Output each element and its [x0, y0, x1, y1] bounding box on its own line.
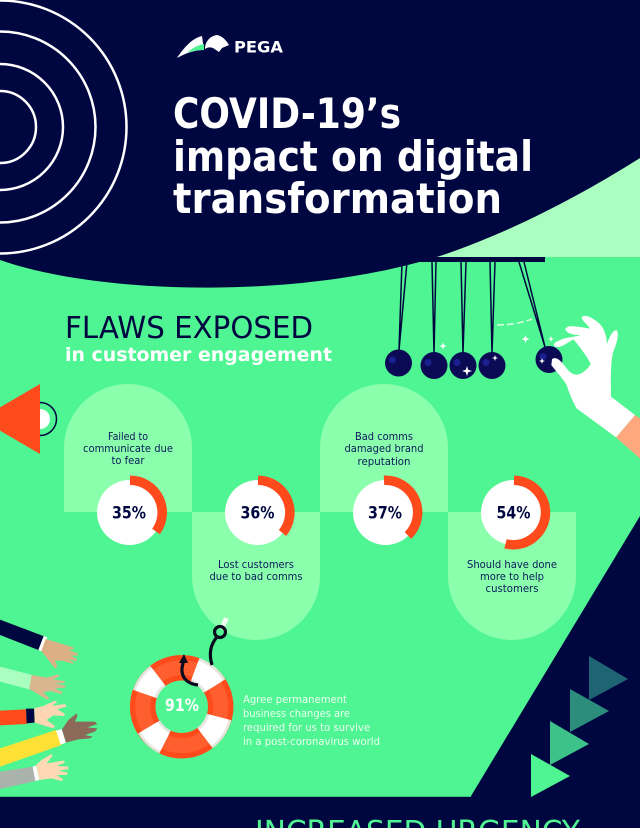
- icon: reaching hands: [0, 620, 97, 789]
- text: permanent change: [243, 693, 380, 748]
- heading: flaws exposed: FLAWS EXPOSED: [65, 311, 313, 346]
- stat: 36% lost customers: due to bad comms: [210, 570, 303, 583]
- logo: Pega: [177, 35, 284, 58]
- stat: 36% lost customers: 36%: [240, 504, 274, 524]
- ball highlights: [389, 353, 546, 366]
- stat: 35% failed to communicate: communicate due: [83, 442, 173, 455]
- stat: 37% damaged reputation: reputation: [358, 455, 411, 468]
- stat: 54% should have done more: more to help: [480, 570, 544, 583]
- cradle strings: [399, 262, 545, 353]
- icon: hand holding ball: [551, 316, 640, 458]
- header curve: [0, 0, 640, 288]
- title: [173, 89, 533, 223]
- stat: 37% damaged reputation: damaged brand: [344, 442, 424, 455]
- icon: lifebuoy with hook: [143, 618, 226, 746]
- stat: 35% failed to communicate: [83, 430, 173, 545]
- text: permanent change: required for us to survive: [243, 721, 370, 734]
- title: COVID-19’s: [173, 89, 401, 138]
- stat: 35% failed to communicate: 35%: [112, 504, 146, 524]
- hand 2 pale sleeve: [0, 667, 66, 700]
- fishing hook: [179, 618, 226, 685]
- heading: flaws exposed: in customer engagement: [65, 344, 332, 366]
- stat: 37% damaged reputation: Bad comms: [355, 430, 413, 443]
- hand 1 navy sleeve: [0, 620, 78, 668]
- stat: 36% lost customers: Lost customers: [218, 558, 294, 571]
- title: impact on digital: [173, 132, 533, 181]
- text: permanent change: Agree permanement: [243, 693, 348, 706]
- hand 4 yellow sleeve: [0, 713, 97, 767]
- stat: 54% should have done more: 54%: [496, 504, 530, 524]
- stat: 54% should have done more: customers: [486, 582, 539, 595]
- light green band behind curve: [400, 140, 640, 257]
- cradle balls: [385, 346, 562, 379]
- text: permanent change: in a post-coronavirus world: [243, 735, 380, 748]
- stat: 54% should have done more: Should have done: [467, 558, 557, 571]
- stat: 35% failed to communicate: Failed to: [108, 430, 148, 443]
- title: transformation: [173, 174, 502, 223]
- hand 5 grey sleeve: [0, 754, 68, 789]
- stat: 54% should have done more: [467, 480, 557, 595]
- icon: Newton's cradle: [385, 257, 562, 379]
- stat: 35% failed to communicate: to fear: [112, 454, 145, 467]
- text: permanent change: business changes are: [243, 707, 350, 720]
- heading: flaws exposed: [65, 311, 332, 366]
- icon: orange triangle with circle: [0, 384, 56, 454]
- logo: Pega: PEGA: [234, 38, 284, 56]
- icon: play triangles: [531, 656, 628, 797]
- concentric circles decoration: [0, 0, 126, 254]
- lifebuoy figure: 91%: [165, 696, 199, 716]
- lifebuoy white segments: [145, 670, 219, 742]
- stat: 36% lost customers: [210, 480, 303, 583]
- stat: 37% damaged reputation: [344, 430, 424, 545]
- cradle bar: [415, 257, 545, 262]
- stat: 37% damaged reputation: 37%: [368, 504, 402, 524]
- panel: stat pills: [64, 384, 576, 640]
- swing arrow: [497, 319, 532, 325]
- hand 3 orange sleeve: [0, 701, 67, 728]
- sparkles: [440, 335, 554, 376]
